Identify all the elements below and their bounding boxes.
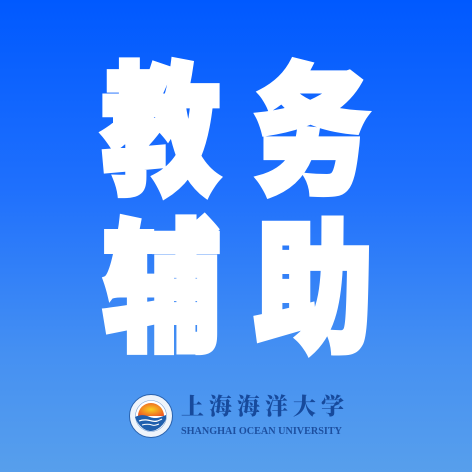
logo: Chinese university name: 上海海洋大学 <box>181 394 349 419</box>
character: 助: 助 <box>254 211 373 370</box>
logo: English university name: SHANGHAI OCEAN UNIVERSITY <box>181 425 342 437</box>
character: 教: 教 <box>102 54 220 212</box>
character: 辅: 辅 <box>103 211 221 369</box>
university logo lockup <box>130 394 349 438</box>
title: 教务辅助 <box>102 54 373 370</box>
character: 务: 务 <box>253 55 369 213</box>
icon: university emblem <box>130 394 172 438</box>
